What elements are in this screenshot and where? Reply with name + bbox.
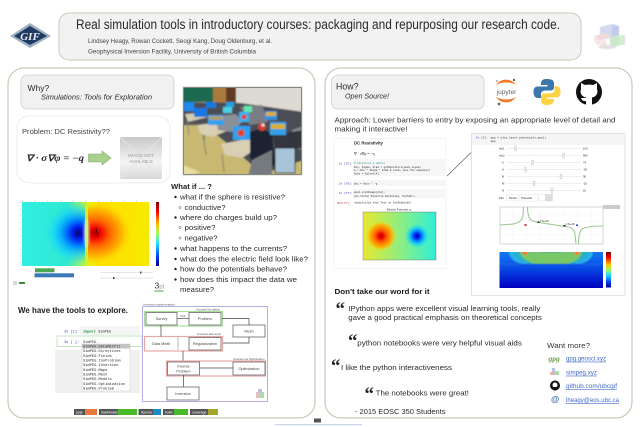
links: want more: Want more? — [547, 341, 590, 350]
notebook: interactive app — [472, 134, 625, 296]
diagram: inversion implementation: Inversion — [175, 392, 191, 396]
text: what if list: conductive? — [184, 203, 226, 212]
notebook: autocomplete: SimPEG.Models — [83, 377, 112, 382]
text: what if list: positive? — [184, 223, 216, 232]
diagram: inversion implementation: Inverse — [177, 364, 190, 368]
text: approach: Approach: Lower barriers to entry by exposing an appropriate level of detail and — [334, 116, 616, 125]
heading: testimonials: Don't take our word for it — [334, 287, 430, 296]
plot toggle buttons: Potential — [521, 196, 532, 200]
notebook: DC resistivity: DC Resistivity — [354, 140, 384, 146]
logo: jupyter: jupyter — [496, 89, 517, 96]
quotes: The notebooks were great! — [376, 389, 469, 398]
notebook: DC resistivity: <matplotlib.text.Text at 0x10b6bce10> — [354, 200, 412, 204]
badges: coverage — [192, 411, 206, 415]
links: want more: gpg.geosci.xyz — [566, 357, 606, 363]
notebook: DC resistivity: In [77]: — [339, 191, 352, 195]
quotes: I like the python interactiveness — [341, 363, 452, 372]
badges: downloads — [101, 411, 118, 415]
text: what if list: negative? — [184, 234, 218, 242]
diagram: inversion implementation: Forward Simulation — [196, 308, 221, 312]
diagram: inversion implementation: Mesh — [244, 330, 254, 334]
diagram: inversion implementation — [142, 302, 268, 402]
notebook: DC resistivity: In [76]: — [339, 182, 352, 186]
notebook: DC resistivity: phi = Ainv * -q — [354, 182, 378, 186]
notebook: DC resistivity: plt.title('Electric Potential, $\phi$') — [354, 194, 415, 198]
notebook: autocomplete: SimPEG.DataMisfit — [83, 344, 121, 350]
licence badge — [275, 418, 362, 425]
quotes: “ — [336, 299, 345, 320]
panel: how (right): making it interactive! — [334, 125, 408, 134]
sliders — [507, 148, 581, 190]
logo: SimPEG cube — [594, 24, 625, 49]
potential plot — [363, 212, 436, 260]
plot toggle buttons: Plot — [499, 196, 504, 200]
notebook: DC resistivity: # Construct a matrix — [354, 161, 386, 165]
heading box: why: Simulations: Tools for Exploration — [41, 94, 152, 102]
notebook: autocomplete: SimPEG.Optimization — [83, 382, 125, 387]
image placeholder: IMAGE NOT — [128, 153, 154, 158]
panel: why (left) — [8, 68, 315, 418]
notebook: interactive app: B — [502, 174, 504, 178]
diagram: inversion implementation: Pair — [181, 314, 186, 318]
diagram: inversion implementation: Inversion as Optimization — [233, 357, 265, 361]
colour bar — [156, 202, 159, 266]
badges: pypi — [76, 411, 83, 415]
notebook: interactive app: N — [502, 188, 504, 192]
arrow — [88, 151, 111, 165]
diagram: inversion implementation: Survey — [156, 317, 168, 321]
inverse problem group — [166, 361, 266, 376]
notebook: interactive app: In [3]: — [476, 136, 488, 140]
badges: license — [141, 411, 152, 415]
line plot: 2.5e+00 — [540, 220, 549, 223]
notebook: autocomplete: In [1]: — [64, 330, 79, 334]
notebook: autocomplete — [55, 326, 142, 393]
notebook: autocomplete: SimPEG.Inversion — [83, 363, 118, 368]
notebook: interactive app: -10 — [583, 182, 587, 186]
notebook: interactive app: M — [502, 182, 505, 186]
line plot — [500, 205, 620, 244]
notebook: interactive app: rho2 — [499, 154, 505, 158]
notebook: autocomplete: SimPEG. — [83, 340, 98, 345]
notebook: interactive app: 74 — [583, 160, 587, 164]
links: want more: lheagy@eos.ubc.ca — [566, 398, 620, 404]
notebook: DC resistivity: ∇ · σ∇φ = −q — [353, 152, 375, 156]
notebook: interactive app: 30 — [583, 174, 587, 178]
diagram: inversion implementation: Optimization — [238, 367, 260, 371]
notebook: autocomplete: import SimPEG — [83, 330, 111, 334]
text: what if list: measure? — [180, 285, 214, 294]
notebook: autocomplete: SimPEG.Fields — [83, 354, 112, 359]
icon: github — [550, 380, 560, 390]
text: what if list: what happens to the currents? — [179, 244, 287, 253]
text: what if list: where do charges build up? — [179, 213, 277, 222]
notebook: autocomplete: SimPEG.Mesh — [83, 372, 107, 378]
photo: computer lab — [182, 86, 304, 177]
problem box: Problem: DC Resistivity?? — [22, 127, 110, 136]
quotes: gave a good practical emphasis on theoretical concepts — [348, 313, 542, 322]
title panel — [59, 13, 581, 60]
notebook: interactive app: rho1 — [499, 146, 505, 150]
text: what if list — [171, 182, 308, 294]
logo: python — [534, 79, 560, 105]
diagram: inversion implementation: Inversion Elements — [197, 332, 221, 336]
icon: at: @ — [551, 394, 559, 404]
chart: sphere potential heat map — [13, 201, 165, 292]
heading box: why: Why? — [28, 83, 50, 93]
badges: build — [165, 411, 172, 415]
logo: GIF diamond: GIF — [20, 31, 40, 43]
notebook: DC resistivity: Out[77]: — [337, 201, 350, 205]
affiliation: Geophysical Inversion Facility, University of British Columbia — [88, 49, 256, 56]
notebook: autocomplete: SimPEG.Problem — [83, 386, 115, 392]
heading box: why — [21, 75, 174, 109]
notebook: autocomplete: SimPEG.Maps — [83, 368, 107, 373]
notebook: DC resistivity: In [75]: — [339, 162, 352, 166]
logo: github — [576, 79, 602, 105]
diagram: inversion implementation: Inversion Implementation — [144, 302, 175, 306]
notebook: interactive app: 10 — [583, 188, 587, 192]
mesh — [233, 325, 265, 337]
notebook: interactive app: A — [502, 168, 504, 172]
image placeholder — [120, 137, 162, 179]
inversion elements group — [144, 336, 222, 351]
text: what if list: what does the electric field look like? — [179, 254, 308, 264]
notebook: interactive app: 800 — [583, 154, 588, 158]
quotes: “ — [364, 384, 374, 405]
notebook: interactive app: h — [502, 160, 504, 164]
notebook: interactive app: -30 — [583, 168, 587, 172]
notebook: interactive app: app — [490, 140, 496, 143]
image placeholder: AVAILABLE — [129, 159, 153, 164]
text: what if list: what if the sphere is resistive? — [179, 192, 285, 202]
badges — [74, 409, 218, 415]
notebook: DC resistivity: Ainv = Solver(A) — [354, 172, 379, 176]
arrow: notebook to app — [447, 135, 489, 176]
plot toggle buttons — [499, 194, 552, 201]
notebook: autocomplete: SimPEG.Directives — [83, 349, 121, 354]
inversion box — [167, 387, 199, 400]
equation: ∇ · σ∇φ = −q — [26, 153, 85, 163]
forward simulation group — [144, 312, 222, 326]
text: what if list: What if ... ? — [171, 182, 212, 191]
notebook: DC resistivity — [334, 138, 446, 268]
links: want more — [547, 341, 620, 404]
notebook: interactive app: app = plot_layer_potentials_app() — [490, 136, 546, 140]
text: what if list: how does this impact the data we — [180, 275, 297, 284]
text: what if list: how do the potentials behave? — [180, 264, 287, 274]
logo: GIF diamond — [10, 23, 51, 48]
notebook: DC resistivity: mesh.plotImage(phi); — [354, 190, 385, 194]
links: want more: github.com/ubcgif — [566, 384, 617, 390]
diagram: inversion implementation: Regularization — [193, 342, 217, 346]
heading box: how: How? — [336, 82, 359, 92]
section colour bar — [606, 252, 611, 288]
diagram: inversion implementation: Problem — [176, 370, 191, 374]
heading box: how — [332, 75, 484, 109]
notebook: DC resistivity: Div, Sigma, Grad = getOperators(mesh,sigma) — [354, 165, 421, 169]
notebook: interactive app: 100 — [583, 146, 588, 150]
quotes: IPython apps were excellent visual learning tools, really — [348, 304, 541, 313]
section plot — [500, 252, 611, 288]
diagram: inversion implementation: Problem — [198, 317, 212, 321]
quotes: “ — [331, 356, 340, 377]
icon: simpeg — [550, 368, 559, 375]
problem box — [17, 116, 170, 183]
widget buttons — [35, 268, 54, 272]
plot toggle buttons: Model — [509, 196, 517, 200]
heading: tools: We have the tools to explore. — [18, 306, 128, 315]
notebook: autocomplete: SimPEG.InvProblem — [83, 358, 121, 364]
quotes: “ — [348, 331, 358, 352]
icon: gpg: gpg — [548, 354, 560, 363]
logo: jupyter — [496, 79, 517, 105]
notebook: autocomplete: In [ ]: — [64, 340, 79, 345]
heading box: how: Open Source! — [345, 94, 389, 100]
3pt logo: 3pt — [154, 280, 165, 290]
title: Real simulation tools in introductory courses: packaging and repurposing our research code. — [76, 17, 560, 32]
quotes: python notebooks were very helpful visual aids — [357, 339, 522, 348]
quotes: - 2015 EOSC 350 Students — [355, 407, 446, 416]
panel: how (right) — [325, 68, 632, 418]
line plot: 2.5e+00 — [566, 223, 575, 226]
authors: Lindsey Heagy, Rowan Cockett, Seogi Kang, Doug Oldenburg, et al. — [88, 38, 272, 45]
notebook: DC resistivity: Electric Potential, φ — [387, 208, 411, 212]
quotes — [331, 299, 542, 416]
diagram: inversion implementation: Data Misfit — [152, 342, 171, 346]
links: want more: simpeg.xyz — [566, 371, 597, 377]
notebook: DC resistivity: A = Div * Sigma * Grad # looks like the equation! — [354, 168, 430, 172]
